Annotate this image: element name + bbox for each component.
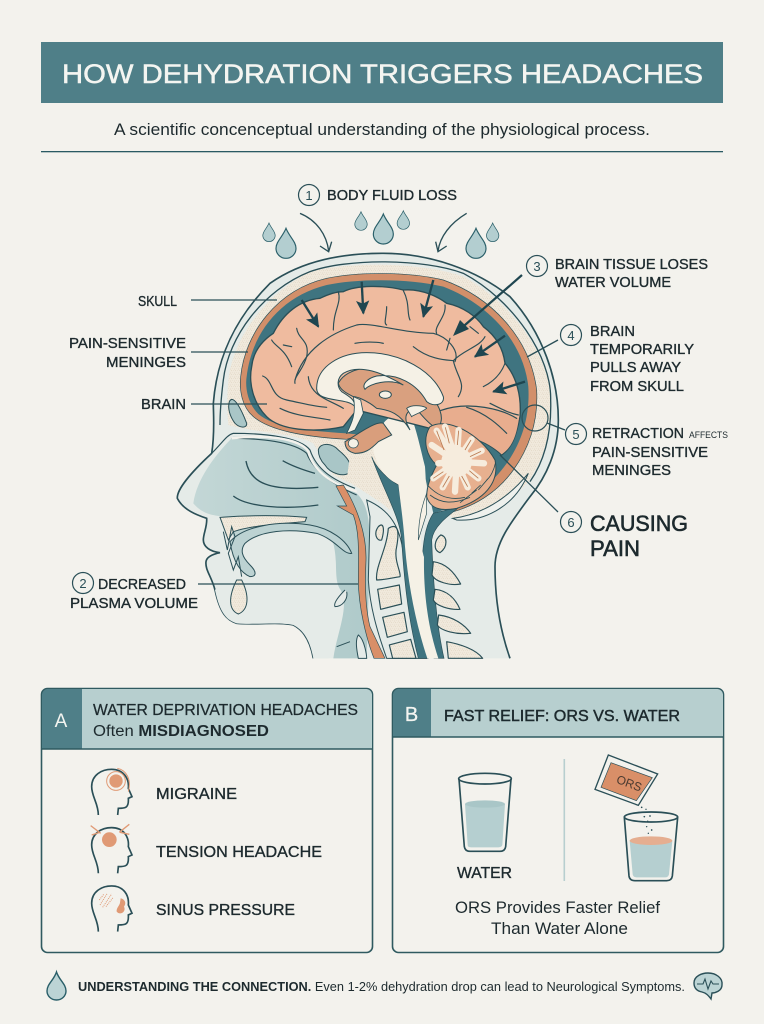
panel A header	[42, 689, 372, 749]
palate	[220, 516, 307, 540]
label: migraine: MIGRAINE	[156, 786, 237, 803]
icon: ORS sachet pouring into glass: ORS	[615, 772, 644, 794]
icon: migraine head	[92, 768, 132, 815]
panel A header: WATER DEPRIVATION HEADACHES	[93, 702, 358, 719]
brain label: BRAIN	[141, 397, 186, 413]
meninges label: PAIN-SENSITIVE	[69, 336, 186, 352]
3 brain tissue label: 3	[533, 259, 541, 274]
footer note	[47, 972, 722, 1000]
4 brain pulls away label: PULLS AWAY	[590, 360, 681, 376]
panel B conclusion text	[455, 899, 660, 938]
label: sinus pressure: SINUS PRESSURE	[156, 902, 295, 919]
1 body fluid loss label: 1	[305, 188, 313, 203]
6 causing pain label: 6	[567, 515, 575, 530]
corpus callosum arc	[317, 353, 443, 407]
cerebrum	[251, 286, 520, 455]
2 decreased plasma volume label: PLASMA VOLUME	[70, 596, 198, 612]
cerebellum	[426, 424, 496, 510]
brain label	[141, 397, 267, 413]
pituitary region	[345, 423, 392, 453]
skull bone layer	[227, 265, 551, 520]
3 brain tissue label	[453, 256, 708, 336]
icon: glass of water	[459, 773, 511, 851]
4 brain pulls away label: TEMPORARILY	[590, 342, 694, 358]
panel A header: A	[55, 711, 68, 732]
footer text: UNDERSTANDING THE CONNECTION. Even 1-2% dehydration drop can lead to Neurological Symptoms.	[78, 979, 685, 994]
2 decreased plasma volume label: DECREASED	[98, 577, 186, 593]
icon: sinus head	[92, 886, 132, 932]
title banner	[41, 42, 723, 103]
panel B header	[393, 689, 723, 737]
chin bone	[231, 580, 247, 614]
nasal cavity	[193, 436, 370, 658]
5 retraction label: PAIN-SENSITIVE	[592, 445, 708, 461]
skull base cream sliver	[453, 473, 528, 520]
3 brain tissue label: WATER VOLUME	[555, 275, 671, 291]
4 brain pulls away label	[527, 324, 694, 395]
lower jaw tissue	[215, 532, 340, 658]
2 decreased plasma volume label: 2	[79, 576, 87, 591]
5 retraction label: AFFECTS	[689, 430, 728, 441]
icon: tension head	[91, 824, 132, 873]
5 retraction label: RETRACTION	[592, 426, 684, 442]
label: tension headache: TENSION HEADACHE	[156, 844, 322, 861]
5 retraction label: MENINGES	[592, 463, 671, 479]
sphenoid bone	[347, 455, 390, 510]
neck cervical column	[367, 500, 427, 658]
deep brain structures	[338, 368, 441, 430]
5 retraction label: 5	[572, 427, 580, 442]
arrows: brain shrinking	[302, 280, 525, 392]
title banner: HOW DEHYDRATION TRIGGERS HEADACHES	[62, 59, 703, 89]
pharyngeal detail	[335, 590, 367, 658]
panel B conclusion text: Than Water Alone	[491, 920, 628, 938]
panel B conclusion text: ORS Provides Faster Relief	[455, 899, 660, 917]
cerebrospinal fluid space	[246, 280, 529, 513]
2 decreased plasma volume label	[70, 572, 358, 612]
icon: footer drop	[47, 972, 66, 1000]
6 causing pain label: PAIN	[590, 536, 640, 561]
subtitle: A scientific concenceptual understanding of the physiological process.	[114, 121, 650, 139]
4 brain pulls away label: 4	[567, 328, 575, 343]
label: water: WATER	[457, 865, 512, 882]
3 brain tissue label: BRAIN TISSUE LOSES	[555, 257, 708, 273]
brainstem and spinal cord	[373, 412, 438, 658]
panel A: misdiagnosed headaches	[42, 688, 372, 952]
skull label	[138, 294, 277, 310]
occipital lower region	[437, 407, 519, 454]
icon: ORS sachet pouring into glass	[595, 755, 678, 881]
brain gyri	[263, 291, 518, 433]
panel B: fast relief	[392, 688, 724, 952]
pharynx orange strip	[336, 485, 385, 658]
panel A header: Often MISDIAGNOSED	[93, 723, 269, 740]
5 retraction label	[522, 405, 728, 479]
water drops and curved arrows	[263, 211, 499, 258]
1 body fluid loss label: BODY FLUID LOSS	[327, 188, 457, 204]
spinal canal teal	[372, 457, 428, 658]
6 causing pain label	[500, 455, 688, 561]
4 brain pulls away label: FROM SKULL	[590, 379, 684, 395]
meninges label: MENINGES	[106, 355, 186, 371]
sinus	[318, 444, 351, 475]
icon: footer brain pulse	[694, 973, 722, 999]
skull label: SKULL	[138, 294, 177, 310]
meninges band	[240, 274, 537, 513]
frontal sinus	[229, 399, 247, 427]
4 brain pulls away label: BRAIN	[590, 324, 635, 340]
6 causing pain label: CAUSING	[590, 511, 688, 536]
head anatomy cross-section	[177, 253, 558, 658]
head silhouette	[177, 253, 558, 658]
meninges label	[69, 336, 248, 371]
panel B header: B	[405, 704, 418, 726]
1 body fluid loss label	[298, 184, 457, 206]
cervical vertebrae	[376, 525, 483, 658]
nasal conchae lines	[233, 461, 318, 507]
panel B header: FAST RELIEF: ORS VS. WATER	[444, 708, 680, 725]
